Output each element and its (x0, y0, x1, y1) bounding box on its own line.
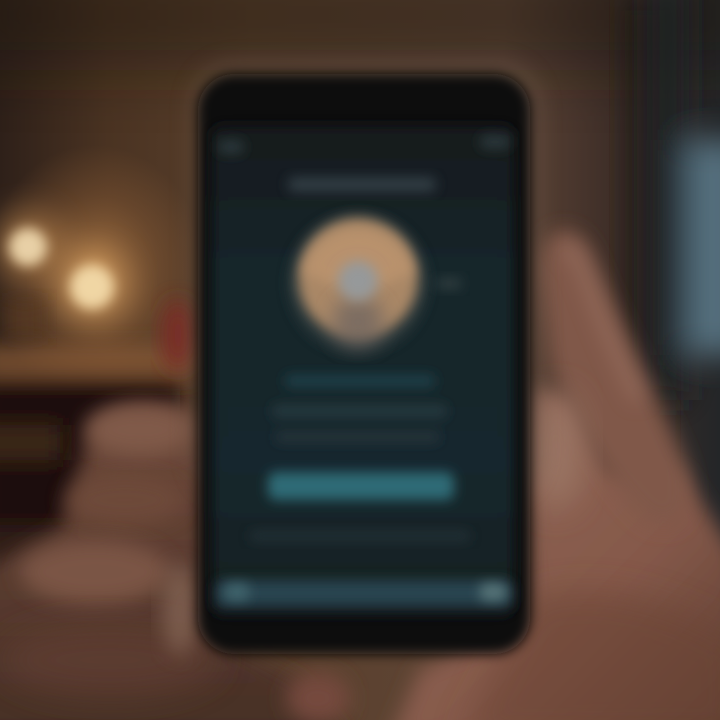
top status icons (218, 135, 510, 154)
teal button (268, 472, 454, 500)
red object behind phone (161, 299, 195, 371)
text lines (272, 375, 447, 442)
right hand: palm and finger (390, 230, 720, 720)
phone body (198, 74, 530, 654)
circular dial (288, 213, 428, 353)
phone edge highlight (190, 60, 542, 500)
lamp: two glowing bulbs (0, 211, 128, 338)
table surface (0, 345, 195, 720)
screen heading (288, 177, 436, 192)
left hand: fingers and thumb (0, 404, 350, 720)
phone screen (212, 125, 514, 615)
bottom nav bar (216, 580, 512, 606)
phone (190, 60, 542, 654)
bottom nav end icons (225, 583, 506, 601)
caption line (250, 530, 470, 542)
window on the right (652, 0, 720, 400)
dial side marker (436, 278, 462, 289)
warm lamp glow (0, 145, 205, 395)
